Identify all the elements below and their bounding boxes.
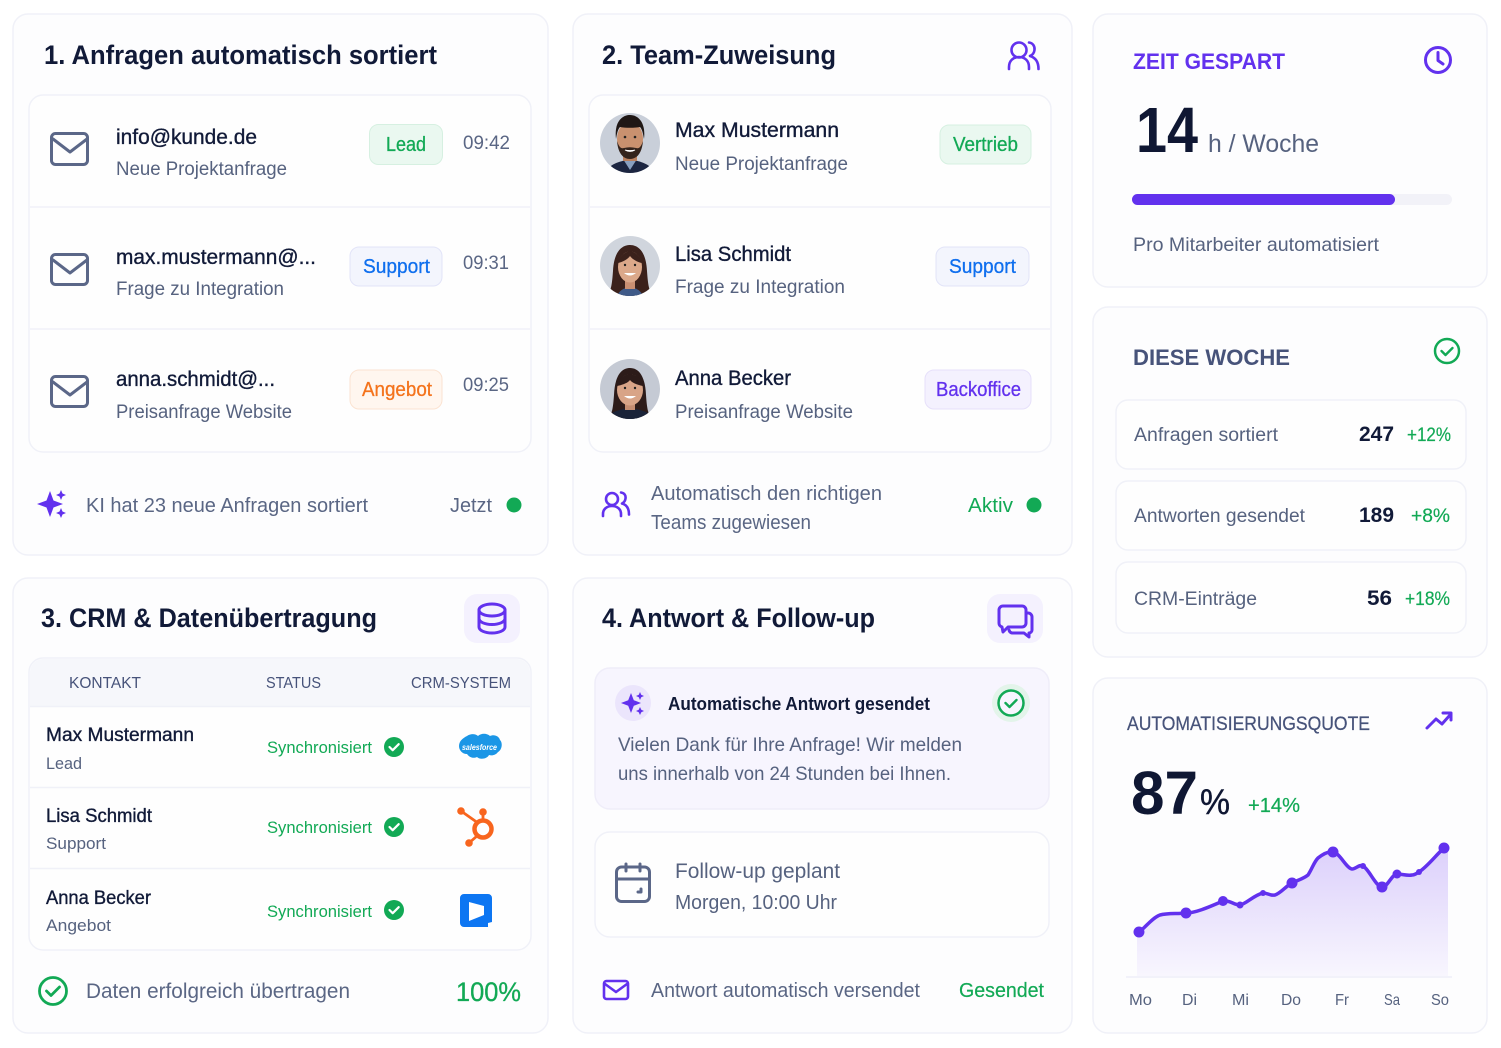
stat: Anfragen sortiert: 247: [1359, 423, 1394, 446]
badge: Backoffice: [925, 370, 1031, 409]
table header: KONTAKT: [69, 675, 141, 692]
panel: Zeit gespart: [1093, 14, 1487, 287]
status label: Gesendet: [959, 980, 1044, 1002]
name: Lisa Schmidt: [675, 243, 791, 266]
panel: Automatisierungsquote: [1093, 678, 1487, 1033]
callout text: [618, 734, 962, 785]
axis labels: Mo: [1129, 992, 1152, 1009]
callout text: uns innerhalb von 24 Stunden bei Ihnen.: [618, 763, 951, 785]
icon: check circle: [1435, 339, 1459, 363]
value: +14%: [1248, 795, 1300, 817]
row: Anna Becker: [46, 888, 492, 935]
avatar: Anna: [600, 359, 660, 419]
subject: Frage zu Integration: [116, 279, 284, 300]
icon: check circle: [992, 684, 1030, 722]
stat: Antworten gesendet: +8%: [1411, 506, 1450, 527]
name: Anna Becker: [675, 367, 791, 390]
axis labels: Fr: [1335, 992, 1350, 1009]
follow-up text: [675, 860, 840, 914]
list: Zuweisungen: [589, 95, 1051, 452]
icon: check circle: [40, 978, 66, 1004]
axis labels: [1129, 992, 1449, 1009]
footer: KI-Status: [37, 490, 522, 518]
axis labels: Mi: [1232, 992, 1249, 1009]
table: CRM-Kontakte: [29, 658, 531, 950]
axis labels: Do: [1281, 992, 1301, 1009]
status: Synchronisiert: [267, 818, 372, 837]
badge: Support: Support: [949, 256, 1016, 278]
contact: [46, 806, 153, 853]
status text: Automatisch den richtigen: [651, 483, 882, 505]
row: Max Mustermann: [46, 725, 502, 773]
footer: Übertragung: [40, 977, 521, 1007]
contact: [46, 888, 152, 935]
icon: envelope: [52, 254, 88, 284]
stat: CRM-Einträge: 56: [1367, 587, 1392, 610]
icon: envelope: [604, 981, 628, 999]
panel: 4. Antwort & Follow-up: [573, 578, 1072, 1033]
label: ZEIT GESPART: [1133, 49, 1286, 74]
heading: Anfragen: 1. Anfragen automatisch sortiert: [44, 40, 437, 70]
heading: Antwort: 4. Antwort & Follow-up: [602, 603, 875, 633]
icon: calendar: [616, 864, 650, 902]
status text: [651, 483, 882, 534]
table header: [30, 659, 530, 706]
sender: anna.schmidt@...: [116, 368, 275, 391]
footer: Versand: [604, 980, 1044, 1002]
avatar: Lisa: [600, 236, 660, 296]
badge: Support: Support: [363, 256, 430, 278]
subject: Preisanfrage Website: [675, 402, 853, 423]
badge: Backoffice: Backoffice: [936, 379, 1021, 401]
badge: Lead: [370, 124, 442, 164]
row: Lisa Schmidt: [46, 806, 492, 853]
subject: Neue Projektanfrage: [116, 159, 287, 180]
status: Synchronisiert: [267, 902, 372, 921]
sender: max.mustermann@...: [116, 246, 316, 269]
axis labels: Di: [1182, 992, 1197, 1009]
subject: Preisanfrage Website: [116, 402, 292, 423]
icon: sparkles: [615, 685, 651, 721]
row: Max Mustermann: [600, 113, 1031, 175]
progress bar: [1132, 194, 1452, 205]
contact: Max Mustermann: [46, 725, 194, 746]
status dot: [506, 498, 522, 512]
follow-up text: Morgen, 10:00 Uhr: [675, 892, 837, 914]
time: 09:31: [463, 253, 509, 274]
logo: blue tile: [460, 894, 492, 927]
status text: Daten erfolgreich übertragen: [86, 980, 350, 1003]
footer: Team-Status: [603, 483, 1042, 534]
callout heading: Automatische Antwort gesendet: [668, 694, 930, 714]
value: [1131, 759, 1300, 827]
subject: Neue Projektanfrage: [675, 154, 848, 175]
panel: 2. Team-Zuweisung: [573, 14, 1072, 555]
panel: 1. Anfragen automatisch sortiert: [13, 14, 548, 555]
follow-up text: Follow-up geplant: [675, 860, 840, 883]
heading: Team-Zuweisung: 2. Team-Zuweisung: [602, 40, 836, 70]
badge: Support: [936, 247, 1029, 286]
contact: Anna Becker: [46, 888, 152, 909]
icon: users: [603, 492, 629, 516]
table header: CRM-SYSTEM: [411, 675, 511, 692]
contact: Lisa Schmidt: [46, 806, 153, 827]
icon: envelope: [52, 134, 88, 164]
label: AUTOMATISIERUNGSQUOTE: [1127, 713, 1370, 735]
stat: Antworten gesendet: 189: [1359, 504, 1394, 527]
time: 09:25: [463, 375, 509, 396]
caption: Pro Mitarbeiter automatisiert: [1133, 234, 1380, 256]
status text: Teams zugewiesen: [651, 512, 811, 534]
stat: Anfragen sortiert: [1116, 400, 1466, 469]
sender: info@kunde.de: [116, 126, 257, 149]
axis labels: Sa: [1384, 992, 1400, 1009]
logo: Salesforce: [459, 734, 502, 759]
row: anna.schmidt: [52, 368, 509, 423]
icon: envelope: [52, 376, 88, 406]
logo: Salesforce: salesforce: [462, 742, 497, 752]
row: max.mustermann: [52, 246, 509, 300]
row: Anna Becker: [600, 359, 1031, 423]
panel: Diese Woche: [1093, 307, 1487, 657]
status dot: [1026, 498, 1042, 512]
stat: CRM-Einträge: CRM-Einträge: [1134, 589, 1257, 610]
value: %: [1200, 783, 1230, 822]
badge: Angebot: Angebot: [362, 379, 432, 401]
name: Max Mustermann: [675, 119, 839, 142]
card: Follow-up: [595, 832, 1049, 937]
stat: Antworten gesendet: [1116, 481, 1466, 550]
avatar: Max: [600, 113, 660, 173]
stat: Anfragen sortiert: Anfragen sortiert: [1134, 425, 1279, 446]
subject: Frage zu Integration: [675, 277, 845, 298]
badge: Vertrieb: Vertrieb: [953, 134, 1018, 156]
contact: Angebot: [46, 916, 111, 935]
callout text: Vielen Dank für Ihre Anfrage! Wir melden: [618, 734, 962, 756]
area chart: [1126, 842, 1452, 977]
stat: CRM-Einträge: +18%: [1405, 589, 1450, 610]
badge: Vertrieb: [940, 125, 1031, 164]
icon: sparkles: [37, 490, 66, 518]
row: Lisa Schmidt: [600, 236, 1029, 298]
list: eingehende Anfragen: [29, 95, 531, 452]
logo: HubSpot: [457, 807, 492, 847]
status: Synchronisiert: [267, 738, 372, 757]
time label: Jetzt: [450, 495, 492, 517]
axis labels: So: [1431, 992, 1449, 1009]
stat: CRM-Einträge: [1116, 562, 1466, 633]
row: info@kunde.de: [52, 124, 510, 180]
value: 87: [1131, 759, 1198, 827]
contact: [46, 725, 194, 773]
heading: CRM: 3. CRM & Datenübertragung: [41, 603, 377, 633]
contact: Support: [46, 834, 106, 853]
icon: chat bubbles: [987, 594, 1043, 643]
icon: clock: [1426, 48, 1450, 72]
value: [1136, 94, 1319, 166]
percent: 100%: [456, 977, 521, 1007]
icon: trend up: [1427, 713, 1451, 728]
table header: STATUS: [266, 675, 321, 692]
panel: 3. CRM & Datenübertragung: [13, 578, 548, 1033]
badge: Lead: Lead: [386, 134, 426, 156]
icon: users: [1009, 42, 1038, 69]
label: DIESE WOCHE: [1133, 345, 1290, 370]
contact: Lead: [46, 754, 82, 773]
stat: Antworten gesendet: Antworten gesendet: [1134, 506, 1306, 527]
badge: Angebot: [350, 370, 442, 409]
stat: Anfragen sortiert: +12%: [1407, 425, 1451, 446]
value: h / Woche: [1208, 130, 1319, 158]
status label: Aktiv: [968, 495, 1013, 517]
status text: Antwort automatisch versendet: [651, 980, 920, 1002]
badge: Support: [350, 247, 442, 286]
callout: automatische Antwort: [595, 668, 1049, 809]
status text: KI hat 23 neue Anfragen sortiert: [86, 495, 368, 517]
value: 14: [1136, 94, 1198, 166]
time: 09:42: [463, 133, 510, 154]
icon: database: [464, 594, 520, 643]
